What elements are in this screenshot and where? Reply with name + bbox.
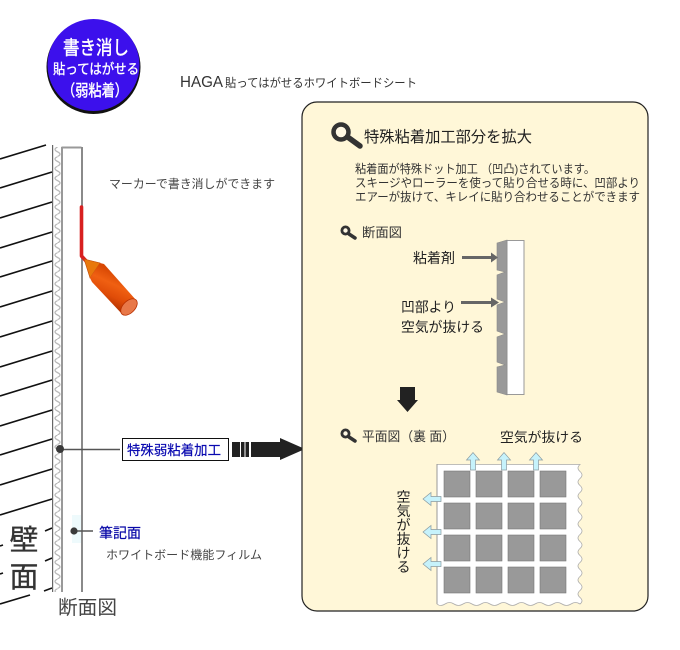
callout: writing surface xyxy=(70,515,262,562)
label: air escapes from recess: 凹部より xyxy=(401,299,456,315)
icon: magnifier small, section xyxy=(342,227,355,238)
label: air escapes top: 空気が抜ける xyxy=(500,430,583,445)
icon: magnifier large xyxy=(334,124,360,146)
label: air escapes from recess xyxy=(401,298,499,335)
badge: erasable, removable, weak adhesive: 貼ってはがせる xyxy=(53,61,139,77)
label: air escapes left: 空気が抜ける xyxy=(396,489,410,575)
panel heading: 特殊粘着加工部分を拡大 xyxy=(364,128,532,146)
description text: エアーが抜けて、キレイに貼り合わせることができます xyxy=(355,189,640,204)
callout: special weak adhesive xyxy=(56,438,228,460)
description text xyxy=(355,161,640,204)
adhesive cross-section diagram xyxy=(497,240,524,395)
panel: enlarged view xyxy=(302,102,648,611)
plan sheet with dots xyxy=(437,464,582,606)
wall label: 壁 xyxy=(9,524,39,557)
wall label: 面 xyxy=(9,562,39,594)
icon: magnifier small, plan xyxy=(342,430,355,441)
description text: スキージやローラーを使って貼り合せる時に、凹部より xyxy=(355,175,640,190)
plan heading: 平面図（裏 面） xyxy=(362,429,455,444)
callout: writing surface: ホワイトボード機能フィルム xyxy=(106,548,262,562)
marker caption: マーカーで書き消しができます xyxy=(109,176,275,191)
badge: erasable, removable, weak adhesive: （弱粘着） xyxy=(62,82,128,100)
arrow to enlarged panel xyxy=(232,438,305,460)
label: adhesive xyxy=(413,250,498,266)
product title: HAGA xyxy=(180,74,223,91)
marker pen xyxy=(82,207,140,318)
label: adhesive: 粘着剤 xyxy=(413,250,455,266)
wall hatching xyxy=(0,145,52,604)
description text: 粘着面が特殊ドット加工 （凹凸)されています。 xyxy=(355,161,595,176)
product title: 貼ってはがせるホワイトボードシート xyxy=(225,75,417,90)
cross-section of film on wall xyxy=(52,145,83,592)
wall label xyxy=(9,524,39,594)
label: air escapes from recess: 空気が抜ける xyxy=(401,319,484,335)
product title xyxy=(180,74,417,91)
callout: special weak adhesive: 特殊弱粘着加工 xyxy=(127,442,221,458)
badge: erasable, removable, weak adhesive: 書き消し xyxy=(63,37,129,59)
arrow: down xyxy=(397,387,418,412)
air arrows xyxy=(423,452,542,570)
cross-section label: 断面図 xyxy=(58,597,117,619)
badge: erasable, removable, weak adhesive xyxy=(46,19,140,114)
callout: writing surface: 筆記面 xyxy=(99,525,141,541)
section heading: 断面図 xyxy=(362,225,402,240)
